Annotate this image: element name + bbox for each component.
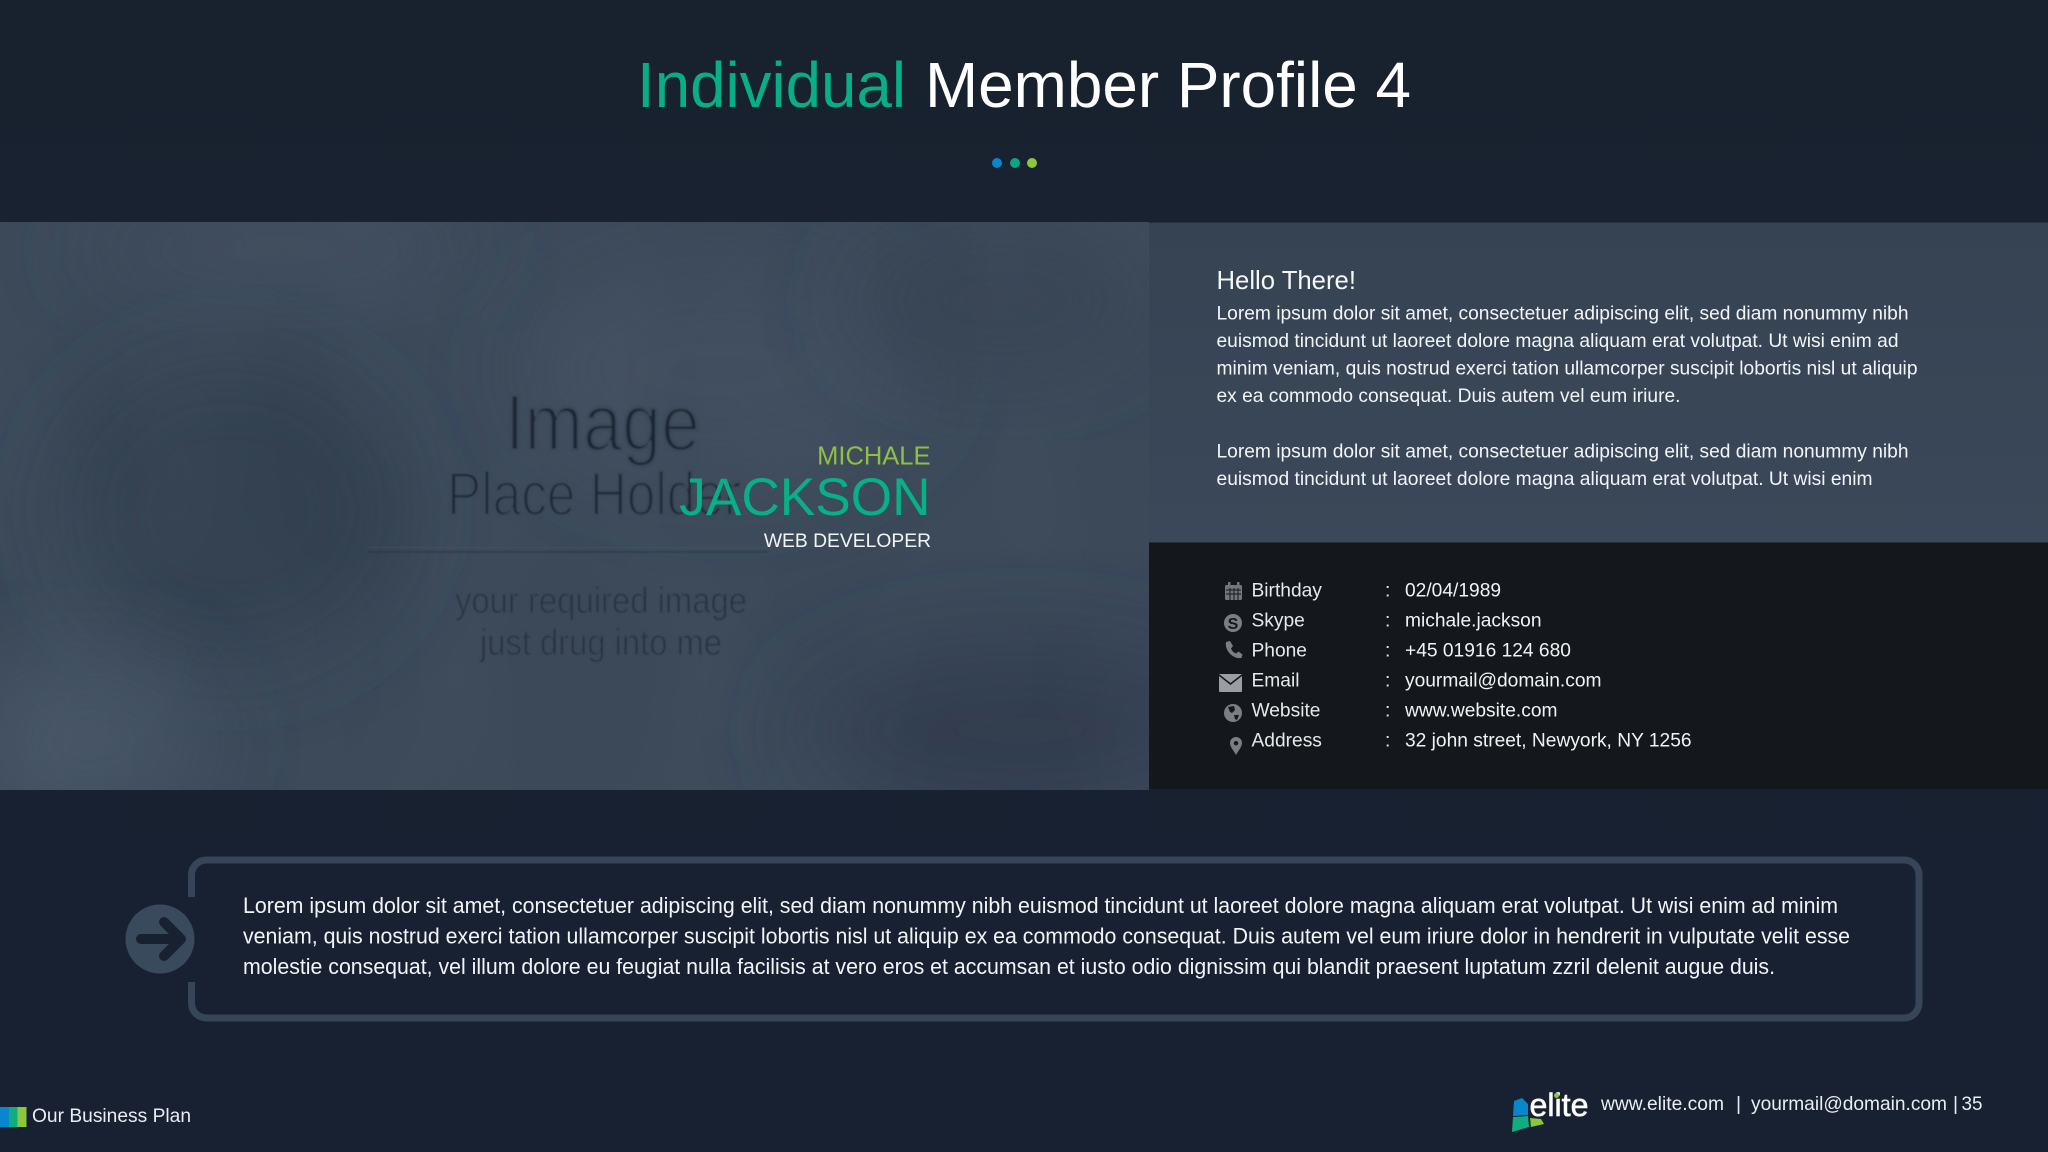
icon: skype: S [1228,616,1239,633]
contact labels: Skype [1252,610,1305,632]
footer contact: | [1953,1093,1958,1115]
placeholder text: Image [505,378,700,467]
footer contact: 35 [1962,1093,1983,1115]
icon: colour squares [0,1107,26,1127]
about heading: Hello There! [1216,267,1356,295]
placeholder text: just drug into me [479,622,722,663]
name block [679,442,931,552]
about paragraphs [1216,303,1918,490]
callout text [243,893,1850,979]
contact values: yourmail@domain.com [1405,670,1602,692]
callout text: molestie consequat, vel illum dolore eu feugiat nulla facilisis at vero eros et accumsan et iusto odio dignissim qui blandit praesent luptatum zzril delenit augue duis. [243,954,1775,979]
icon: calendar [1225,582,1242,600]
logo: elite [1512,1087,1588,1132]
about paragraphs: minim veniam, quis nostrud exerci tation ullamcorper suscipit lobortis nisl ut aliquip [1216,358,1918,380]
contact colons: : [1385,670,1390,692]
about paragraphs: euismod tincidunt ut laoreet dolore magna aliquam erat volutpat. Ut wisi enim ad [1216,330,1898,352]
footer contact [1600,1093,1983,1115]
contact colons: : [1385,580,1390,602]
contact colons: : [1385,640,1390,662]
footer left: Our Business Plan [32,1105,191,1127]
name block: JACKSON [679,468,930,527]
footer contact: | [1736,1093,1741,1115]
contact colons: : [1385,610,1390,632]
decorative dots under title [992,158,1037,168]
panel: image placeholder [0,222,1149,790]
contact values: 32 john street, Newyork, NY 1256 [1405,730,1692,752]
contact values: www.website.com [1404,700,1557,722]
footer contact: www.elite.com [1600,1093,1724,1115]
footer contact: yourmail@domain.com [1751,1093,1947,1115]
placeholder text [368,378,768,663]
name block: MICHALE [817,442,930,470]
about paragraphs: Lorem ipsum dolor sit amet, consectetuer adipiscing elit, sed diam nonummy nibh [1216,441,1908,463]
contact labels: Address [1252,730,1322,752]
panel: contact details [1149,542,2048,789]
contact colons [1385,580,1390,752]
icon: email [1219,674,1242,692]
contact values: michale.jackson [1405,610,1542,632]
contact labels: Email [1252,670,1299,692]
contact labels: Website [1252,700,1320,722]
contact values: +45 01916 124 680 [1405,640,1571,662]
contact labels: Birthday [1252,580,1322,602]
name block: WEB DEVELOPER [764,531,931,552]
icon: arrow circle [126,904,194,974]
contact labels: Phone [1252,640,1307,662]
title: Individual [637,49,906,121]
icon: website globe [1224,704,1242,722]
placeholder text: Place Holder [447,460,741,528]
contact colons: : [1385,730,1390,752]
logo: elite: elite [1530,1087,1588,1123]
callout box [126,860,1919,1018]
about paragraphs: euismod tincidunt ut laoreet dolore magna aliquam erat volutpat. Ut wisi enim [1216,468,1872,490]
callout text: Lorem ipsum dolor sit amet, consectetuer adipiscing elit, sed diam nonummy nibh euismod tincidunt ut laoreet dolore magna aliquam erat volutpat. Ut wisi enim ad minim [243,893,1838,918]
panel: about text [1149,222,2048,542]
title [637,49,1411,121]
icon: phone [1226,641,1242,658]
title: Member Profile 4 [925,49,1411,121]
placeholder text: your required image [455,580,747,621]
contact labels [1252,580,1322,752]
callout text: veniam, quis nostrud exerci tation ullamcorper suscipit lobortis nisl ut aliquip ex ea commodo consequat. Duis autem vel eum iriure dolor in hendrerit in vulputate velit esse [243,924,1850,948]
icon: skype [1224,614,1242,633]
contact values: 02/04/1989 [1405,580,1501,602]
callout border [192,860,1919,1018]
contact colons: : [1385,700,1390,722]
contact values [1404,580,1692,752]
about paragraphs: ex ea commodo consequat. Duis autem vel eum iriure. [1216,385,1680,407]
icon: address pin [1230,737,1242,755]
footer right [1512,1087,1983,1132]
about paragraphs: Lorem ipsum dolor sit amet, consectetuer adipiscing elit, sed diam nonummy nibh [1216,303,1908,325]
